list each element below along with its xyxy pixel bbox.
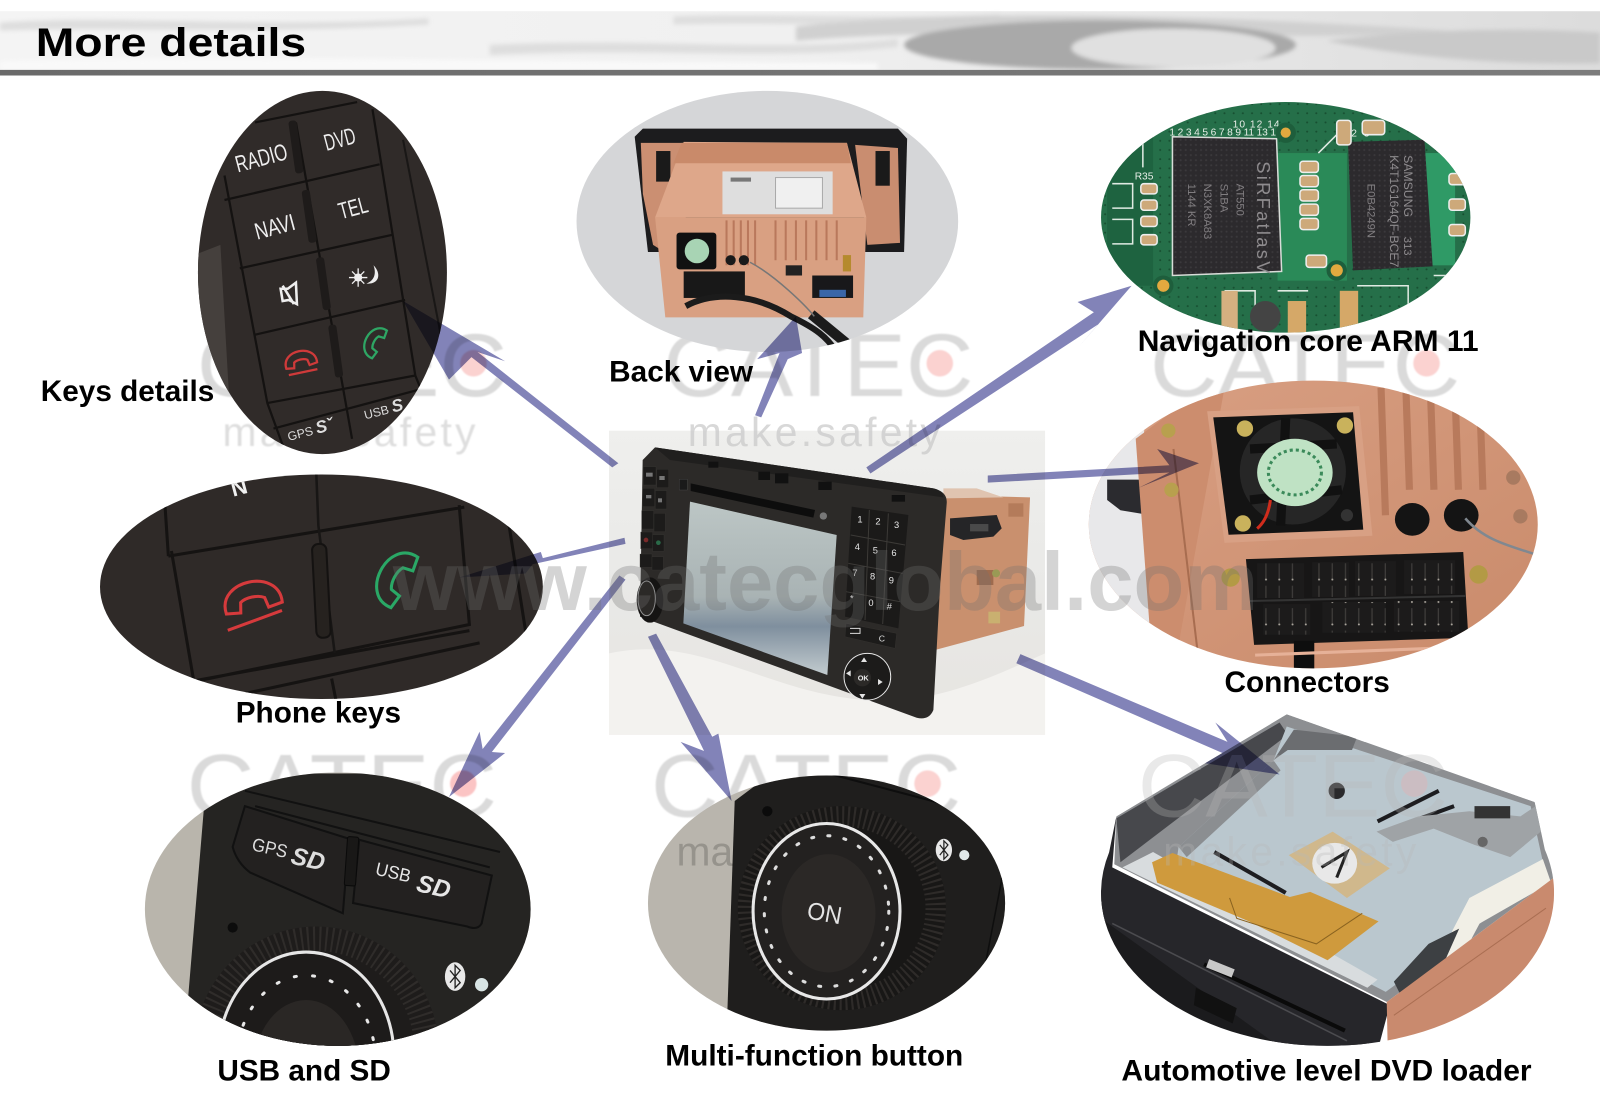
chip: SiRF: AT550: [1234, 184, 1246, 216]
label: connectors: Connectors: [1224, 666, 1390, 699]
chip: SiRF: S1BA: [1217, 184, 1229, 213]
switch pill: [312, 544, 331, 638]
keypad: 0: [868, 598, 874, 608]
keypad: *: [850, 594, 854, 604]
keypad: 4: [855, 542, 860, 552]
arrow: to multi-function button: [648, 634, 732, 801]
status light: [475, 978, 488, 991]
blue terminal: [812, 276, 853, 298]
watermark: website url: www.catecglobal.com: [392, 535, 1258, 628]
side screws: [1161, 423, 1528, 587]
watermark on dvd photo: [1138, 736, 1448, 874]
arrow: to back view: [755, 316, 802, 417]
panel: phone keys photo: [97, 469, 546, 704]
chip: SiRF: 1144 KR: [1185, 184, 1197, 227]
arrow: to usb and sd: [449, 576, 626, 797]
metal arm: [1377, 806, 1541, 857]
arrow: to connectors: [988, 449, 1199, 488]
top clips: [708, 462, 905, 502]
cable: [686, 297, 837, 352]
faceplate: [640, 447, 947, 718]
board silkscreen: 1 2 3: [1339, 129, 1370, 140]
rear connector: [684, 271, 745, 298]
watermark: logos: CATEC: [197, 316, 507, 415]
panel: usb and sd photo: [144, 772, 531, 1046]
navigation ring: [844, 653, 891, 700]
board silkscreen: R35: [1135, 172, 1154, 183]
chip: Samsung: SAMSUNG: [1401, 155, 1415, 217]
keypad: #: [887, 601, 893, 611]
capacitors: [1221, 290, 1358, 333]
rear holes: [726, 255, 736, 265]
copper chassis: [935, 495, 1030, 650]
key labels: NAVI: [252, 209, 298, 245]
watermark over central photo: make.safety: [688, 409, 941, 455]
icon: red handset: [224, 580, 284, 632]
arrow: to navigation core: [866, 286, 1132, 473]
eject key: [679, 479, 687, 490]
panel: dvd loader photo: [1097, 709, 1561, 1051]
chip: Samsung: K4T1G164QF-BCE7: [1387, 155, 1401, 267]
header band: [0, 0, 1600, 76]
sd keys: GPS: [250, 833, 290, 862]
white glyph: N: [228, 473, 250, 502]
chip: Samsung: 313: [1401, 237, 1413, 255]
label: keys details: Keys details: [41, 375, 214, 408]
fan: [1207, 406, 1372, 543]
back and clear keys: C: [879, 634, 885, 644]
sd keys: SD: [414, 870, 453, 904]
fan: [677, 233, 716, 269]
gold flex cable: [1152, 853, 1379, 960]
sd keys: SD: [288, 843, 328, 877]
board silkscreen: [1135, 120, 1370, 183]
title: More details: [36, 21, 306, 65]
navigation ring: OK: [858, 674, 869, 683]
keypad: 5: [873, 545, 878, 555]
keypad: 8: [870, 571, 875, 581]
watermark: logos: CATEC: [187, 736, 497, 835]
keypad: 6: [891, 548, 897, 558]
knob: [637, 577, 663, 623]
cable holes: [1395, 499, 1541, 556]
label: usb and sd: USB and SD: [217, 1055, 391, 1088]
keypad: 1: [857, 515, 863, 525]
arrow: to phone keys: [459, 538, 626, 578]
black power plug: [950, 515, 1002, 540]
panel: navigation core photo: [1097, 100, 1474, 342]
front slot: [1204, 964, 1345, 1031]
watermark: logos: [187, 316, 1460, 835]
watermark: logos: make.safety: [222, 409, 476, 455]
sd key labels: GPS Sˇ: [285, 413, 337, 445]
icon: green handset: [375, 551, 420, 610]
label: phone keys: Phone keys: [236, 696, 401, 729]
keypad: [845, 507, 908, 628]
keypad: 3: [894, 520, 899, 530]
optical pickup: [1289, 832, 1390, 898]
arrow: to keys details: [403, 301, 618, 467]
cooling ribs: [1377, 388, 1486, 515]
label: dvd loader: Automotive level DVD loader: [1121, 1055, 1532, 1088]
icon: bluetooth: [936, 839, 952, 861]
central product photo: [609, 431, 1045, 735]
icon: bluetooth: [445, 962, 465, 991]
disc slot: [691, 483, 815, 518]
icon: green handset: [363, 327, 388, 360]
screen: [683, 502, 837, 675]
chip: SiRF: N3XK8A83: [1201, 184, 1213, 239]
multi-function knob: [202, 926, 436, 1046]
watermark: logos: CATEC: [651, 736, 961, 835]
board silkscreen: 1 2 3 4 5 6 7 8 9 11 13 15: [1169, 128, 1282, 139]
knob: [738, 806, 946, 1010]
board silkscreen: 10 12 14: [1233, 120, 1280, 131]
icon: red handset: [283, 348, 319, 375]
panel: connectors photo: [1082, 378, 1541, 673]
label: multi-function button: Multi-function button: [665, 1039, 963, 1072]
key labels: RADIO: [232, 138, 290, 177]
keypad: 2: [875, 517, 881, 527]
panel: back view photo: [571, 87, 964, 357]
sd keys: [233, 806, 492, 928]
sensor hole: [228, 922, 238, 933]
label: back view: Back view: [609, 356, 754, 389]
icon: mute speaker: [281, 283, 297, 304]
chip: SiRF: [1172, 137, 1282, 276]
white traces: [1112, 134, 1446, 306]
arrow: to dvd loader: [1016, 654, 1280, 774]
label: navigation core: Navigation core ARM 11: [1138, 325, 1479, 358]
watermark: logos: CATEC: [1150, 316, 1460, 415]
key labels: [234, 128, 369, 240]
panel: keys details photo: [194, 87, 449, 459]
wiring connector block: [1246, 552, 1468, 671]
watermark on dvd photo: make.safety: [1163, 828, 1417, 874]
white plastic latch: [1437, 859, 1551, 985]
panel: multi-function button photo: [643, 770, 1010, 1036]
left keys: [640, 467, 669, 570]
chip: Samsung: [1348, 140, 1433, 270]
watermark on multi-function photo: ma: [677, 828, 734, 874]
back and clear keys: [845, 623, 897, 648]
button label: ON: [805, 898, 844, 930]
status light: [959, 850, 969, 860]
left key glyphs: [644, 473, 665, 545]
chip: Samsung: E0B4249N: [1364, 184, 1376, 238]
key labels: TEL: [335, 191, 371, 224]
slot lines: [1158, 791, 1454, 918]
small components: [1141, 120, 1465, 267]
keypad: 7: [852, 568, 858, 578]
gold pads: [1153, 122, 1347, 296]
gold antenna connector: [843, 255, 851, 271]
copper side: [1387, 878, 1554, 1051]
rib lines on rear: [727, 220, 837, 265]
key labels: DVD: [321, 123, 358, 156]
icon: sun and moon: [349, 265, 378, 287]
keypad: 9: [889, 575, 894, 585]
sd key labels: [288, 398, 402, 440]
watermark: logos: CATEC: [663, 316, 973, 415]
watermark on dvd photo: CATEC: [1138, 736, 1448, 835]
sd keys: USB: [374, 858, 413, 886]
chip: SiRF: SiRFatlasV: [1253, 161, 1274, 274]
sd key labels: USB S: [361, 394, 406, 423]
